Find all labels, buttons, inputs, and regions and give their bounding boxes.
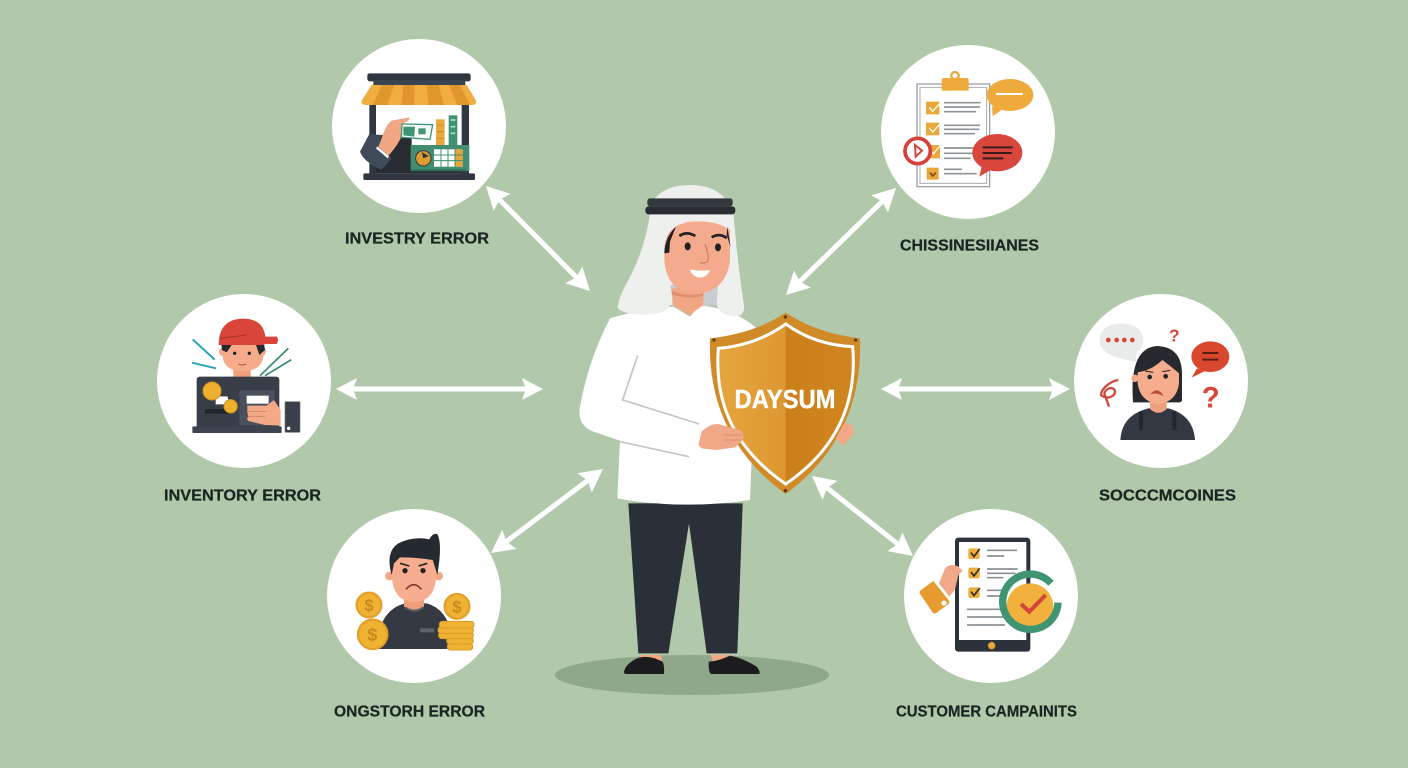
arrow: customer campainits to centre <box>805 467 920 565</box>
label: CUSTOMER CAMPAINITS <box>896 704 1077 720</box>
label: INVENTORY ERROR <box>164 488 321 504</box>
arrow: ongstorh error to centre <box>484 459 610 563</box>
panel: soccmcoines <box>1074 294 1248 504</box>
label: CHISSINESIIANES <box>900 238 1039 254</box>
icon: confused woman with speech bubbles: ? <box>1202 382 1220 415</box>
icon: frowning man with coins <box>357 534 474 650</box>
label: ONGSTORH ERROR <box>334 704 485 720</box>
arrow: chissinesiianes to centre <box>778 179 904 304</box>
panel: customer campainits <box>896 509 1078 720</box>
ground shadow <box>555 655 829 695</box>
icon: market stall <box>360 73 476 180</box>
torso and headdress <box>579 185 757 505</box>
circle background <box>1074 294 1248 468</box>
icon: worker with red cap at laptop <box>192 319 300 433</box>
panel: chissinesiianes <box>881 45 1055 254</box>
arrow: investry error to centre <box>477 178 598 299</box>
panel: investry error <box>332 39 506 248</box>
icon: confused woman with speech bubbles: ? <box>1169 326 1180 346</box>
icon: frowning man with coins: $ <box>452 597 462 616</box>
circle background <box>881 45 1055 219</box>
icon: tablet checklist with badge <box>919 538 1058 652</box>
circle background <box>327 509 501 683</box>
trousers <box>624 503 760 674</box>
arrow: soccmcoines to centre <box>881 378 1070 400</box>
panel: inventory error <box>157 294 331 504</box>
arrow: inventory error to centre <box>336 378 543 400</box>
panel: ongstorh error <box>327 509 501 720</box>
shield: DAYSUM <box>698 313 860 494</box>
icon: frowning man with coins: $ <box>367 625 377 645</box>
circle background <box>904 509 1078 683</box>
shield text: DAYSUM <box>734 386 836 414</box>
icon: checklist and speech bubbles <box>905 72 1033 187</box>
circle background <box>157 294 331 468</box>
icon: frowning man with coins: $ <box>364 596 374 615</box>
label: SOCCCMCOINES <box>1099 488 1236 504</box>
central figure with shield <box>555 185 860 695</box>
circle background <box>332 39 506 213</box>
icon: confused woman with speech bubbles <box>1099 323 1229 440</box>
label: INVESTRY ERROR <box>345 230 489 248</box>
